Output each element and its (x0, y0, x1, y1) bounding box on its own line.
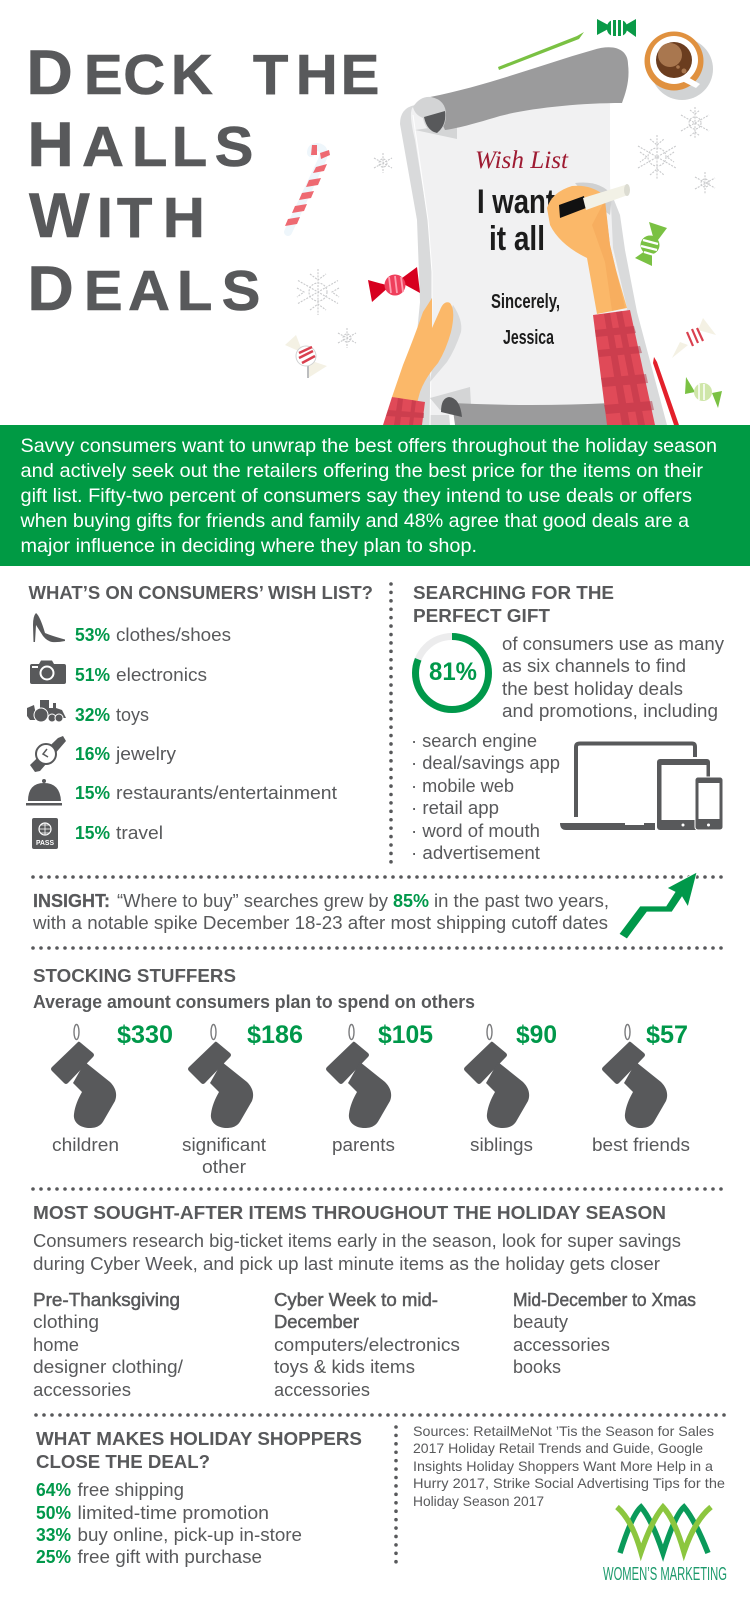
arrow: trend up (619, 872, 697, 939)
text: research intro (33, 1231, 681, 1274)
right sleeve (593, 310, 655, 425)
illustration: scroll with wish list: it all (489, 220, 545, 258)
list: channels: · deal/savings app (411, 753, 560, 773)
text: channels: and promotions, including (502, 701, 718, 721)
stocking: children (51, 1021, 173, 1155)
stocking: siblings (464, 1021, 557, 1155)
heading: searching: SEARCHING FOR THE (413, 583, 614, 603)
stocking: best friends: $57 (646, 1021, 688, 1049)
icon: devices (560, 744, 723, 830)
item: toys: 32% (75, 705, 110, 725)
candy: white and red right (672, 318, 716, 358)
item: jewelry: jewelry (115, 744, 176, 764)
text: channels (502, 634, 724, 721)
wish text: I want (477, 183, 555, 221)
list: channels (411, 731, 560, 863)
column: cyber week (274, 1290, 460, 1400)
illustration: scroll with wish list (400, 47, 667, 425)
panel: intro band: Savvy consumers want to unwrap the best offers throughout the holiday season (20, 435, 717, 457)
text: channels: as six channels to find (502, 656, 686, 676)
panel: intro band: major influence in deciding where they plan to shop. (20, 535, 477, 557)
illustration: red pencil (653, 357, 679, 425)
title: WITH (29, 181, 205, 251)
text: sources: Holiday Season 2017 (413, 1493, 544, 1509)
text: channels: of consumers use as many (502, 634, 724, 654)
list: channels: · word of mouth (411, 821, 540, 841)
stocking: significant other: $186 (247, 1021, 303, 1049)
column: pre-thanksgiving: home (33, 1335, 79, 1355)
illustration: green pencil (498, 32, 584, 70)
text: research intro: during Cyber Week, and pick up last minute items as the holiday gets closer (33, 1254, 660, 1274)
chart: 81% donut (416, 636, 488, 710)
panel: insight: in the past two years, (434, 891, 609, 911)
column: mid-december: Mid-December to Xmas (513, 1290, 696, 1310)
panel: intro band: and actively seek out the retailers offering the best price for the items on their (20, 460, 704, 482)
stocking: parents: $105 (378, 1021, 433, 1049)
subheading: Average amount consumers plan to spend on others (33, 992, 475, 1012)
list: channels: · mobile web (411, 776, 514, 796)
heading: searching: PERFECT GIFT (413, 606, 550, 626)
panel: close the deal (36, 1429, 362, 1567)
item: limited-time promotion: limited-time promotion (78, 1503, 269, 1523)
item: limited-time promotion: 50% (36, 1503, 71, 1523)
icon: watch (30, 736, 66, 772)
candy: red (368, 267, 420, 302)
illustration: snowflakes (297, 107, 715, 348)
panel: most sought-after items (33, 1203, 696, 1400)
stocking: parents: parents (332, 1135, 395, 1155)
title: DEALS (27, 254, 260, 324)
column: cyber week: accessories (274, 1380, 370, 1400)
item: jewelry: 16% (75, 744, 110, 764)
item: electronics: electronics (116, 665, 207, 685)
item: clothes: 53% (75, 625, 110, 645)
logo: women's marketing (603, 1507, 727, 1584)
text: research intro: Consumers research big-ticket items early in the season, look for super savings (33, 1231, 681, 1251)
item: clothes: clothes/shoes (116, 625, 231, 645)
left sleeve (383, 397, 425, 425)
chart: 81% donut: 81% (429, 658, 477, 686)
icon: passport (32, 818, 58, 849)
stocking: siblings: siblings (470, 1135, 533, 1155)
illustration: writing hand (547, 182, 655, 425)
icon: camera (30, 660, 66, 684)
item: travel: 15% (75, 823, 110, 843)
panel: intro band (0, 425, 750, 566)
panel: intro band: gift list. Fifty-two percent of consumers say they intend to use deals or offers (20, 485, 692, 507)
icon: cloche (26, 779, 62, 806)
signature: Sincerely, (491, 291, 560, 313)
column: mid-december: beauty (513, 1312, 568, 1332)
item: travel (75, 823, 163, 843)
list: channels: · search engine (411, 731, 537, 751)
stocking: best friends: best friends (592, 1135, 690, 1155)
stocking: parents (326, 1021, 433, 1155)
stocking: significant other: other (202, 1157, 246, 1177)
item: travel: travel (116, 823, 163, 843)
item: restaurants: restaurants/entertainment (116, 783, 337, 803)
panel: searching for the perfect gift (411, 583, 724, 863)
title: DECK THE (26, 38, 379, 108)
text: sources: 2017 Holiday Retail Trends and Guide, Google (413, 1440, 703, 1456)
stocking: best friends (592, 1021, 690, 1155)
item: buy online: 33% (36, 1525, 71, 1545)
bottom fold (430, 387, 471, 410)
top curl (413, 97, 446, 134)
candy: dark green (597, 19, 636, 37)
text: channels: the best holiday deals (502, 679, 683, 699)
scroll right shadow (610, 190, 667, 425)
stocking: children: children (52, 1135, 119, 1155)
text: sources (413, 1423, 725, 1509)
heading: close the deal: CLOSE THE DEAL? (36, 1452, 210, 1472)
title: HALLS (27, 110, 253, 180)
item: jewelry (75, 744, 176, 764)
illustration: coffee cup (644, 32, 713, 100)
wish list heading: Wish List (475, 147, 569, 174)
column: mid-december (513, 1290, 696, 1377)
top roll (430, 47, 629, 130)
column: cyber week: toys & kids items (274, 1357, 415, 1377)
column: pre-thanksgiving: clothing (33, 1312, 99, 1332)
column: cyber week: December (274, 1312, 359, 1332)
column: pre-thanksgiving (33, 1290, 183, 1400)
item: free shipping (36, 1480, 184, 1500)
panel: insight: INSIGHT: (33, 891, 110, 911)
heading: close the deal: WHAT MAKES HOLIDAY SHOPPERS (36, 1429, 362, 1449)
item: free gift: free gift with purchase (78, 1547, 262, 1567)
item: restaurants: 15% (75, 783, 110, 803)
stocking: significant other (182, 1021, 303, 1177)
illustration: scroll with wish list: Jessica (503, 327, 555, 349)
column: mid-december: accessories (513, 1335, 610, 1355)
text: sources: Sources: RetailMeNot ’Tis the Season for Sales (413, 1423, 714, 1439)
item: toys: toys (116, 705, 149, 725)
panel: insight (32, 891, 609, 933)
title (26, 38, 379, 324)
illustration: holding hand (383, 298, 461, 425)
item: free gift: 25% (36, 1547, 71, 1567)
column: cyber week: computers/electronics (274, 1335, 460, 1355)
stocking: children: $330 (117, 1021, 173, 1049)
heading: most sought-after: MOST SOUGHT-AFTER ITEMS THROUGHOUT THE HOLIDAY SEASON (33, 1203, 666, 1223)
item: electronics (75, 665, 207, 685)
item: toys (75, 705, 149, 725)
icon: toy train (27, 700, 66, 722)
illustration: candies (285, 19, 722, 408)
panel: insight: 85% (393, 891, 429, 911)
heading: stocking stuffers: STOCKING STUFFERS (33, 966, 236, 986)
text: sources: Hurry 2017, Strike Social Advertising Tips for the (413, 1475, 725, 1491)
scroll shadow (400, 105, 450, 425)
stocking: siblings: $90 (516, 1021, 557, 1049)
icon: high heel (33, 613, 65, 642)
column: pre-thanksgiving: accessories (33, 1380, 131, 1400)
column: mid-december: books (513, 1357, 561, 1377)
panel: stocking stuffers (33, 966, 690, 1177)
item: buy online: buy online, pick-up in-store (78, 1525, 302, 1545)
bottom roll (452, 403, 612, 425)
panel: insight: with a notable spike December 18-23 after most shipping cutoff dates (32, 913, 608, 933)
list: channels: · retail app (411, 798, 499, 818)
stocking: significant other: significant (182, 1135, 266, 1155)
column: pre-thanksgiving: designer clothing/ (33, 1357, 183, 1377)
candy: green (635, 222, 667, 266)
panel: intro band: when buying gifts for friends and family and 48% agree that good deals are a (19, 510, 689, 532)
heading: close the deal (36, 1429, 362, 1472)
flap fold (415, 124, 457, 139)
heading: wish list: WHAT’S ON CONSUMERS’ WISH LIST? (28, 583, 373, 603)
text: sources: Insights Holiday Shoppers Want More Help in a (413, 1458, 713, 1474)
paper (411, 100, 627, 415)
item: free shipping: free shipping (78, 1480, 184, 1500)
icon: passport: PASS (36, 840, 54, 847)
candy: light green (685, 377, 722, 408)
panel: insight: “Where to buy” searches grew by (117, 891, 388, 911)
candy: white and red left (285, 335, 327, 378)
list: channels: · advertisement (411, 843, 540, 863)
column: pre-thanksgiving: Pre-Thanksgiving (33, 1290, 180, 1310)
column: cyber week: Cyber Week to mid- (274, 1290, 438, 1310)
illustration: candy cane (285, 145, 330, 232)
heading: searching (413, 583, 614, 626)
item: free shipping: 64% (36, 1480, 71, 1500)
panel: wish list (26, 583, 373, 849)
item: electronics: 51% (75, 665, 110, 685)
